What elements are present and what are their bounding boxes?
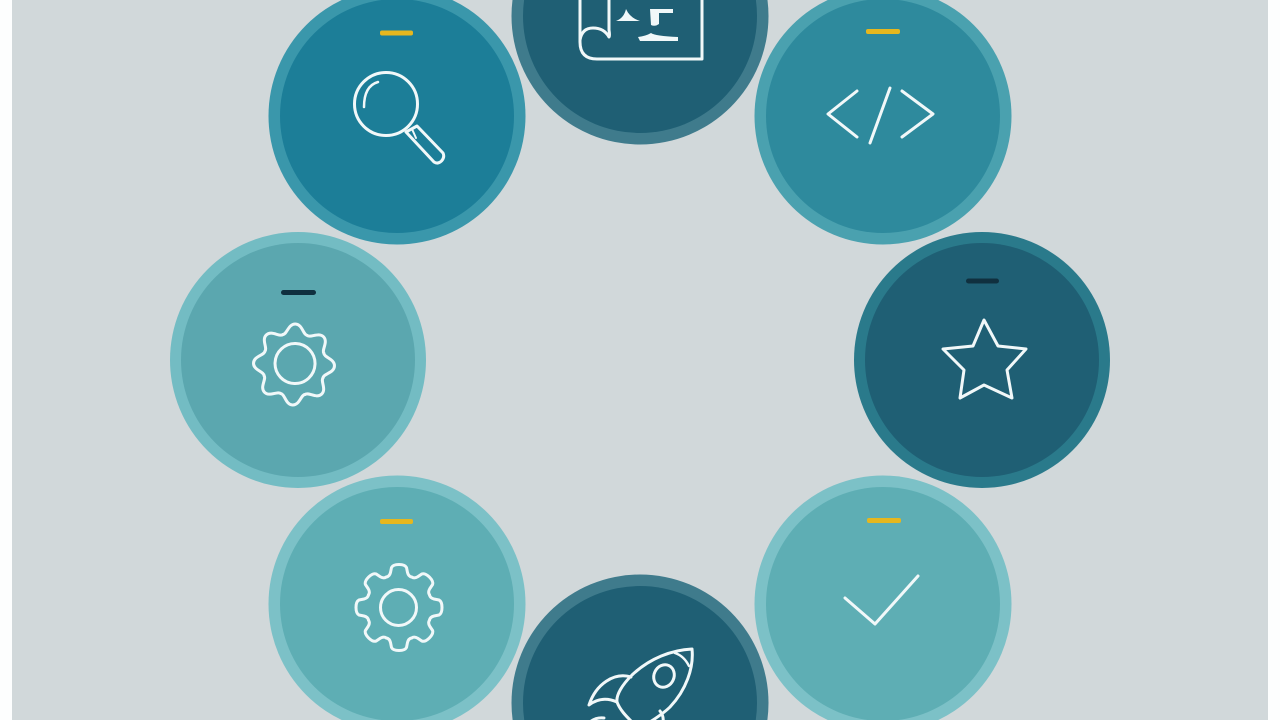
icon: rounded gear: [252, 323, 336, 406]
icon: check mark: [845, 576, 918, 624]
node: launch (rocket): [512, 574, 768, 720]
icon: toothed gear: [356, 564, 442, 650]
node: quality (star): [854, 232, 1110, 488]
node: research (magnifier): [268, 0, 526, 244]
node: development (code): [754, 0, 1012, 244]
icon: blueprint scroll: [580, 0, 702, 59]
node: configuration (right-side gear): [268, 476, 526, 720]
icon: magnifying glass: [354, 72, 444, 163]
node: blueprint: [512, 0, 768, 144]
icon: star: [943, 320, 1026, 398]
icon: code brackets: [828, 88, 933, 143]
icon: rocket: [589, 649, 692, 720]
node: testing (check mark): [754, 476, 1012, 720]
node: settings (left gear): [170, 232, 426, 488]
